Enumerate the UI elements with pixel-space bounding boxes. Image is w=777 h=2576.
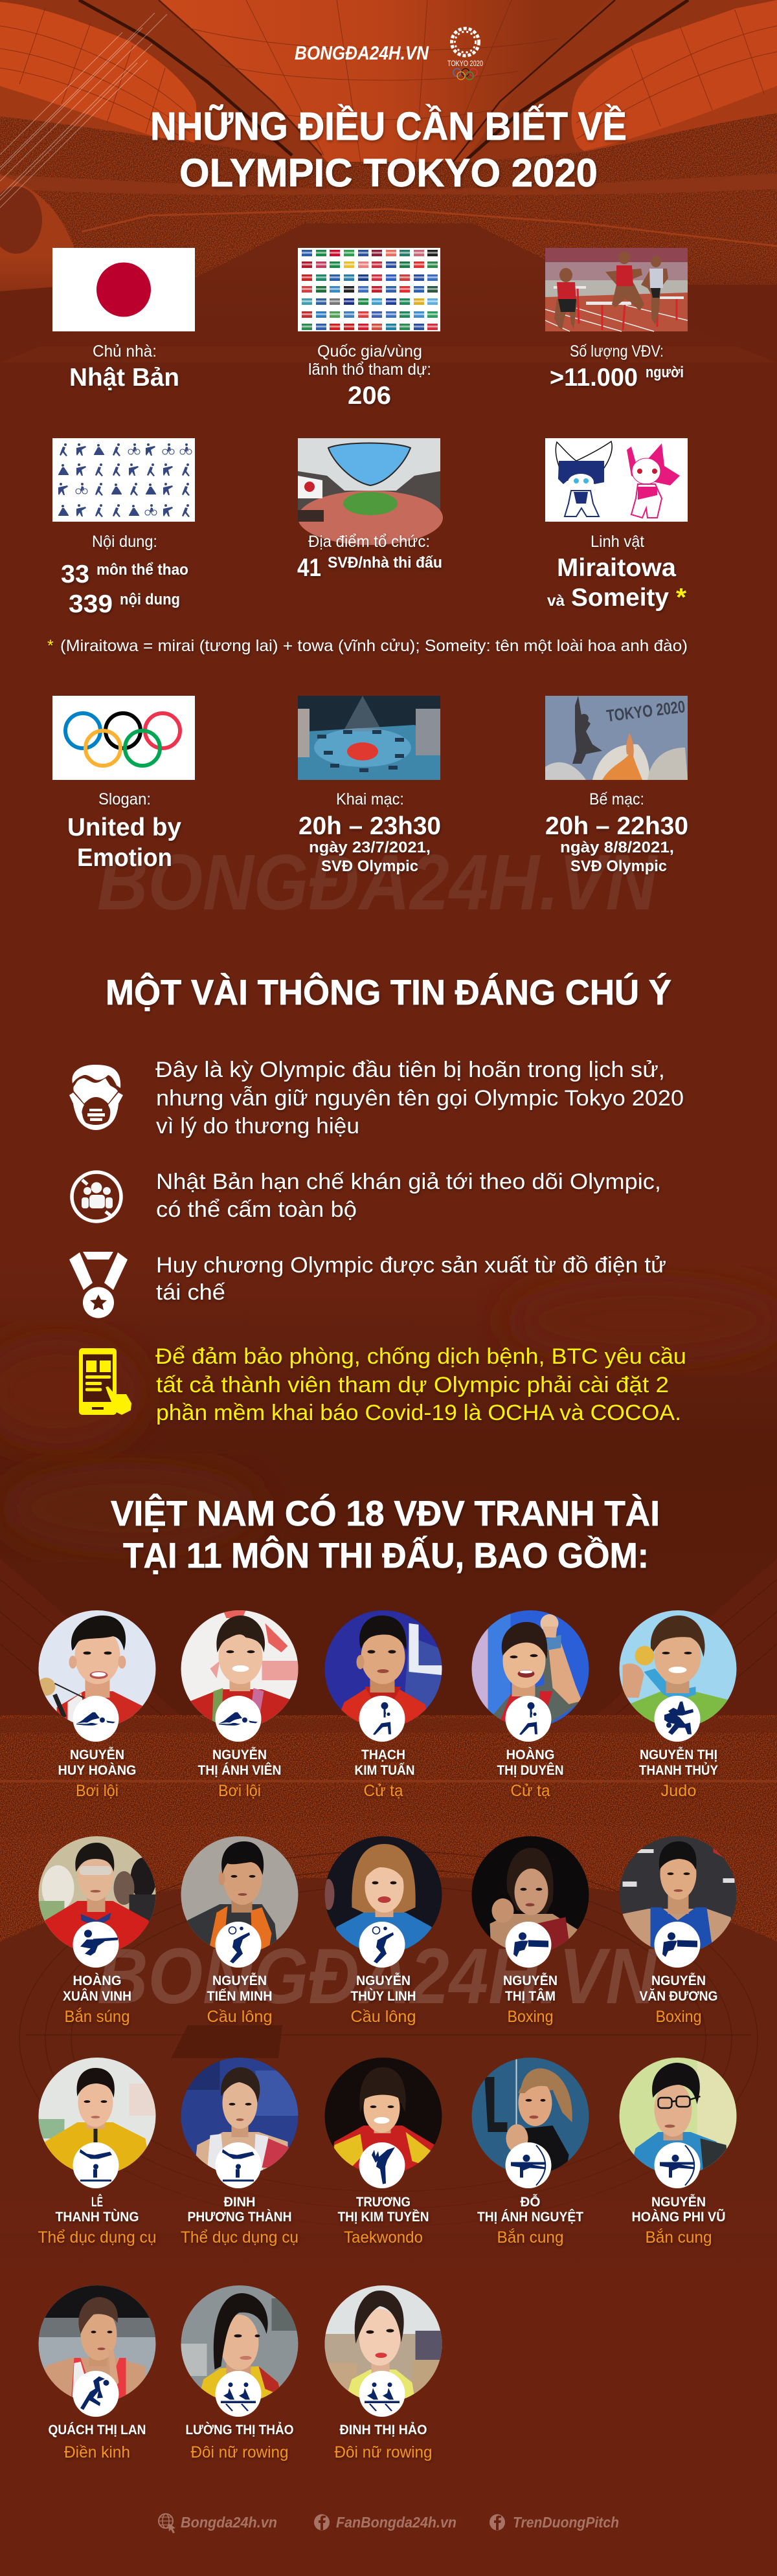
stat: closing ceremony: SVĐ Olympic [570,858,667,875]
athlete: Quách Thị Lan [39,2285,155,2461]
name and sport: LƯỜNG THỊ THẢO [185,2421,294,2437]
stat: mascots [547,533,687,612]
portrait [39,2058,155,2175]
background: top stadium roof and crowd [0,0,777,362]
athlete: Thạch Kim Tuấn [325,1610,442,1800]
athlete: Nguyễn Thị Tâm [471,1836,589,2026]
sport icon [359,2371,405,2417]
sport icon [215,1696,262,1742]
name and sport [38,2193,157,2247]
sport icon [505,1696,552,1742]
name and sport [497,1746,563,1800]
stat: closing ceremony [545,790,688,875]
watermark: upper: BONGĐA24H.VN [97,838,659,926]
text: fact 4: tất cả thành viên tham dự Olympic phải cài đặt 2 [156,1373,669,1397]
name and sport: Đôi nữ rowing [190,2443,289,2461]
name and sport [181,2194,298,2247]
name and sport: Bơi lội [218,1782,261,1800]
portrait [471,1610,589,1727]
stat: host country [69,342,179,392]
name and sport [63,1972,131,2026]
stat: number of athletes: >11.000 [550,364,638,392]
fact 2: limited spectators [72,1170,661,1222]
image: hurdles race photo [545,248,688,331]
stat: slogan: Emotion [77,844,172,872]
portrait [39,2285,155,2403]
name and sport: HOÀNG PHI VŨ [632,2208,725,2225]
watermark: lower: BONGĐA24H.VN [97,1932,659,2020]
name and sport: PHƯƠNG THÀNH [188,2208,291,2225]
stat: sports and events: nội dung [120,591,180,608]
name and sport: NGUYỄN [356,1971,411,1988]
text: fact 1 [155,1058,684,1138]
stat: mascots: Linh vật [591,533,644,551]
portrait [325,2285,442,2403]
name and sport [198,1746,281,1800]
athlete: Nguyễn Tiến Minh [181,1836,298,2026]
text: fact 3 [156,1253,666,1305]
portrait [181,2285,298,2403]
stat: opening ceremony: 20h – 23h30 [298,812,441,840]
name and sport: THÙY LINH [351,1988,416,2004]
stat: mascots: Someity [571,584,669,612]
athlete: Nguyễn Thùy Linh [322,1836,442,2026]
background: darker middle zone and clouds [0,1262,777,2272]
stat: sports and events: môn thể thao [96,561,188,579]
stat: opening ceremony [298,790,441,875]
name and sport: THỊ TÂM [505,1988,556,2004]
stat: opening ceremony: Khai mạc: [336,790,404,808]
name and sport [48,2421,146,2461]
name and sport [632,2193,725,2247]
name and sport: TRƯƠNG [356,2194,411,2210]
text: fact 3: Huy chương Olympic được sản xuất từ đồ điện tử [156,1253,666,1278]
logo: Tokyo 2020 emblem: TOKYO 2020 [447,60,483,68]
name and sport: KIM TUẤN [355,1762,414,1778]
text: fact 1: Đây là kỳ Olympic đầu tiên bị hoãn trong lịch sử, [155,1058,665,1082]
name and sport: Điền kinh [64,2443,130,2461]
stat: host country: Nhật Bản [69,364,179,392]
stat: participating nations: 206 [348,382,391,410]
portrait [181,2058,298,2175]
name and sport: HUY HOÀNG [58,1762,136,1778]
stat: closing ceremony: 20h – 22h30 [545,812,688,840]
title: OLYMPIC TOKYO 2020 [179,151,598,195]
stat: host country: Chủ nhà: [93,342,157,361]
name and sport [503,1971,557,2026]
name and sport [640,1971,717,2026]
name and sport: VĂN ĐƯƠNG [640,1988,717,2004]
name and sport: Boxing [655,2008,702,2026]
athlete: Nguyễn Hoàng Phi Vũ [619,2058,737,2247]
image: sport pictograms [52,438,195,522]
sport icon [215,2371,262,2417]
stat: slogan: Slogan: [98,790,151,808]
stat: slogan: United by [67,814,181,841]
stat: closing ceremony: ngày 8/8/2021, [560,839,674,856]
name and sport [58,1746,136,1800]
athlete: Hoàng Xuân Vinh [39,1836,157,2026]
name and sport: Bắn súng [65,2007,130,2026]
name and sport [355,1747,414,1800]
text: fact 1: vì lý do thương hiệu [156,1114,359,1138]
portrait [619,1610,737,1727]
icon: Facebook second [490,2514,505,2531]
text: fact 3: tái chế [156,1280,225,1305]
name and sport [334,2421,433,2461]
stat: number of athletes: người [646,364,684,381]
name and sport [185,2421,294,2461]
name and sport: THANH THỦY [639,1762,718,1778]
icon: medal [69,1252,128,1318]
name and sport: THỊ ÁNH VIÊN [198,1762,281,1778]
heading: Vietnam delegation: TẠI 11 MÔN THI ĐẤU, BAO GỒM: [123,1535,649,1575]
name and sport: Thể dục dụng cụ [181,2228,298,2247]
sport icon [359,2142,405,2188]
stat: participating nations [308,342,431,410]
image: national flags grid [298,248,440,331]
name and sport: HOÀNG [73,1972,122,1988]
name and sport: Thể dục dụng cụ [38,2228,157,2247]
athlete: Đinh Thị Hảo [325,2285,442,2461]
stat: venues: Địa điểm tổ chức: [308,533,430,551]
text: fact 4 [155,1344,686,1425]
name and sport: TIẾN MINH [207,1988,272,2004]
name and sport: ĐINH [224,2194,255,2210]
portrait [181,1610,298,1727]
stat: sports and events [61,533,188,618]
name and sport: Cầu lông [207,2008,272,2026]
image: closing ceremony torch: TOKYO 2020 [605,696,686,726]
name and sport: Taekwondo [344,2228,423,2247]
stat: opening ceremony: ngày 23/7/2021, [309,839,431,856]
stat: venues: SVĐ/nhà thi đấu [328,554,442,572]
portrait [325,2058,442,2175]
name and sport: NGUYỄN [212,1971,267,1988]
name and sport: THỊ ÁNH NGUYỆT [477,2208,583,2225]
stat: closing ceremony: Bế mạc: [589,790,644,808]
sport icon [73,2371,119,2417]
text: fact 4: phần mềm khai báo Covid-19 là OCHA và COCOA. [156,1401,681,1425]
name and sport [639,1746,718,1800]
name and sport: Bắn cung [497,2228,563,2247]
athlete: Trương Thị Kim Tuyền [325,2058,442,2247]
background: lower stadium crowd and track [0,1559,777,2272]
sport icon [654,2142,701,2188]
athlete: Hoàng Thị Duyên [471,1610,589,1800]
icon: no crowd [72,1172,121,1221]
text: fact 2: có thể cấm toàn bộ [156,1197,357,1222]
sport icon [359,1696,405,1742]
sport icon [73,1696,119,1742]
icon: globe cursor [159,2514,175,2533]
stat: mascots: * [676,584,687,612]
name and sport: THỊ KIM TUYỀN [338,2208,429,2225]
athlete: Nguyễn Huy Hoàng [38,1610,155,1800]
stat: slogan [67,790,181,872]
stat: venues [297,533,442,582]
portrait [181,1836,298,1953]
sport icon [505,2142,552,2188]
stat: participating nations: lãnh thổ tham dự: [308,361,431,379]
portrait [619,2058,737,2175]
name and sport: NGUYỄN [651,2193,706,2210]
sport icon [73,2142,119,2188]
name and sport: ĐỖ [521,2193,540,2210]
name and sport [207,1971,272,2026]
heading: Vietnam delegation [111,1493,660,1575]
stat: opening ceremony: SVĐ Olympic [321,858,418,875]
name and sport: Cầu lông [351,2008,416,2026]
name and sport [338,2194,429,2247]
name and sport: ĐINH THỊ HẢO [339,2421,427,2437]
heading: notable facts: MỘT VÀI THÔNG TIN ĐÁNG CHÚ Ý [106,972,671,1012]
fact 1: postponed Olympics [69,1058,684,1138]
name and sport: THỊ DUYÊN [497,1762,563,1778]
name and sport: NGUYỄN [651,1971,706,1988]
name and sport: Bắn cung [645,2228,712,2247]
sport icon [654,1922,701,1968]
stat: mascots: và [547,592,565,610]
portrait [619,1836,737,1953]
name and sport: LÊ [91,2193,103,2210]
title: NHỮNG ĐIỀU CẦN BIẾT VỀ [150,104,627,148]
sport icon [215,1922,262,1968]
image: closing ceremony torch [545,696,688,780]
stat: venues: 41 [297,554,321,582]
sport icon [505,1922,552,1968]
athlete: Nguyễn Thị Ánh Viên [181,1610,298,1800]
name and sport: Boxing [508,2008,553,2026]
name and sport: Judo [660,1782,697,1800]
stat: number of athletes [550,342,684,392]
name and sport: THẠCH [361,1747,405,1762]
athlete: Nguyễn Thị Thanh Thủy [619,1610,737,1800]
stat: participating nations: Quốc gia/vùng [317,342,422,361]
name and sport: NGUYỄN [70,1746,124,1762]
stat: mascots: Miraitowa [557,554,676,582]
stat: sports and events: 339 [69,590,113,618]
text: fact 4: Để đảm bảo phòng, chống dịch bệnh, BTC yêu cầu [155,1344,686,1369]
athlete: Nguyễn Văn Đương [619,1836,737,2026]
text: fact 2: Nhật Bản hạn chế khán giả tới theo dõi Olympic, [156,1170,661,1194]
portrait [471,2058,589,2175]
stat: sports and events: Nội dung: [92,533,157,551]
footer: website and social links: FanBongda24h.vn [336,2514,456,2531]
stat: number of athletes: Số lượng VĐV: [570,342,664,361]
fact 4: Covid-19 apps [79,1344,686,1425]
name and sport: QUÁCH THỊ LAN [48,2421,146,2437]
image: Japan flag [52,248,195,331]
icon: Facebook [314,2514,330,2531]
name and sport [477,2193,583,2247]
athlete: Đỗ Thị Ánh Nguyệt [471,2058,589,2247]
portrait [325,1610,442,1727]
name and sport: HOÀNG [506,1746,554,1762]
name and sport: Bơi lội [76,1782,118,1800]
image: national stadium [298,438,443,545]
name and sport: XUÂN VINH [63,1988,131,2004]
title [150,104,627,195]
sport icon [215,2142,262,2188]
name and sport: NGUYỄN [212,1746,267,1762]
portrait [39,1836,157,1953]
portrait [38,1610,155,1727]
name and sport: NGUYỄN THỊ [640,1746,717,1762]
footer: website and social links: Bongda24h.vn [181,2514,277,2531]
name and sport: Đôi nữ rowing [334,2443,433,2461]
portrait [471,1836,589,1953]
icon: phone with hand [79,1348,131,1415]
athlete: Đinh Phương Thành [181,2058,298,2247]
image: mascots Miraitowa and Someity [545,438,688,522]
logo: Tokyo 2020 emblem [447,28,483,80]
stat: sports and events: 33 [61,561,89,588]
name and sport: Cử tạ [364,1782,403,1800]
footer: website and social links [159,2514,619,2533]
mascot name footnote: (Miraitowa = mirai (tương lai) + towa (vĩnh cửu); Someity: tên một loài hoa anh đào) [60,637,688,655]
fact 3: recycled medals [69,1252,666,1318]
name and sport: NGUYỄN [503,1971,557,1988]
logo: Bongda24h: BONGĐA24H.VN [295,43,429,64]
text: fact 1: nhưng vẫn giữ nguyên tên gọi Olympic Tokyo 2020 [156,1086,684,1111]
sport icon [654,1696,701,1742]
portrait [322,1836,442,1953]
sport icon [73,1922,119,1968]
name and sport [351,1971,416,2026]
sport icon [359,1922,405,1968]
mascot name footnote: * [47,637,54,655]
heading: Vietnam delegation: VIỆT NAM CÓ 18 VĐV TRANH TÀI [111,1493,660,1533]
text: fact 2 [156,1170,661,1222]
athlete: Lường Thị Thảo [181,2285,298,2461]
name and sport: THANH TÙNG [56,2208,139,2225]
name and sport: Cử tạ [510,1782,550,1800]
image: Olympic rings [52,696,195,780]
footer: website and social links: TrenDuongPitch [513,2514,619,2531]
athlete: Lê Thanh Tùng [38,2058,157,2247]
icon: face mask [69,1065,123,1130]
image: opening ceremony [298,696,440,780]
